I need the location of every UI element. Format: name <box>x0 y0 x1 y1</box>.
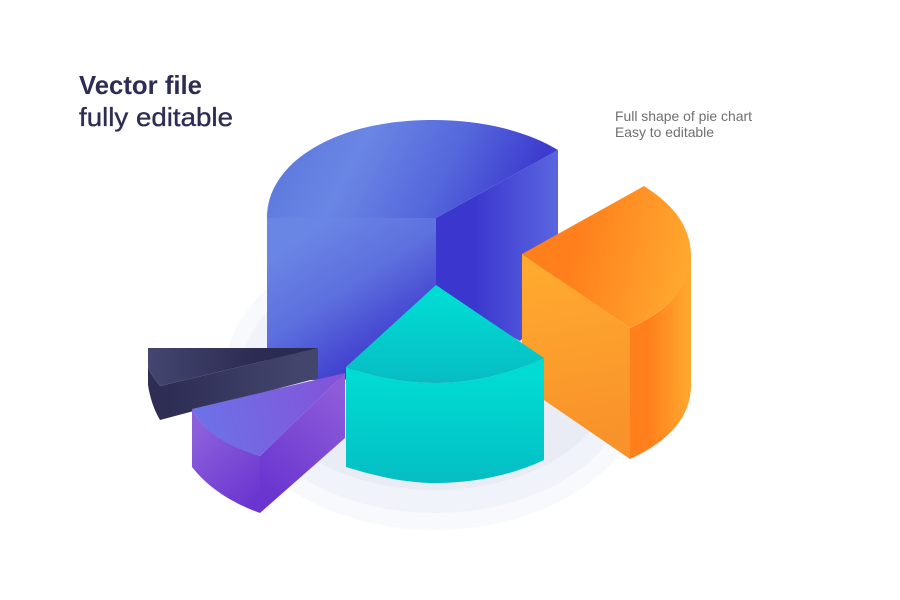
pie slice: cyan <box>346 285 544 483</box>
description text <box>615 108 752 140</box>
description text: Easy to editable <box>615 124 714 140</box>
pie slice: purple <box>192 373 345 513</box>
background: floor ellipses <box>223 230 647 530</box>
title: Vector file <box>79 70 202 100</box>
pie slice: large blue <box>267 120 558 380</box>
title <box>79 70 233 132</box>
description text: Full shape of pie chart <box>615 108 752 124</box>
pie slice: dark navy <box>148 348 318 420</box>
pie slice: orange <box>522 186 691 459</box>
title: fully editable <box>79 102 233 132</box>
